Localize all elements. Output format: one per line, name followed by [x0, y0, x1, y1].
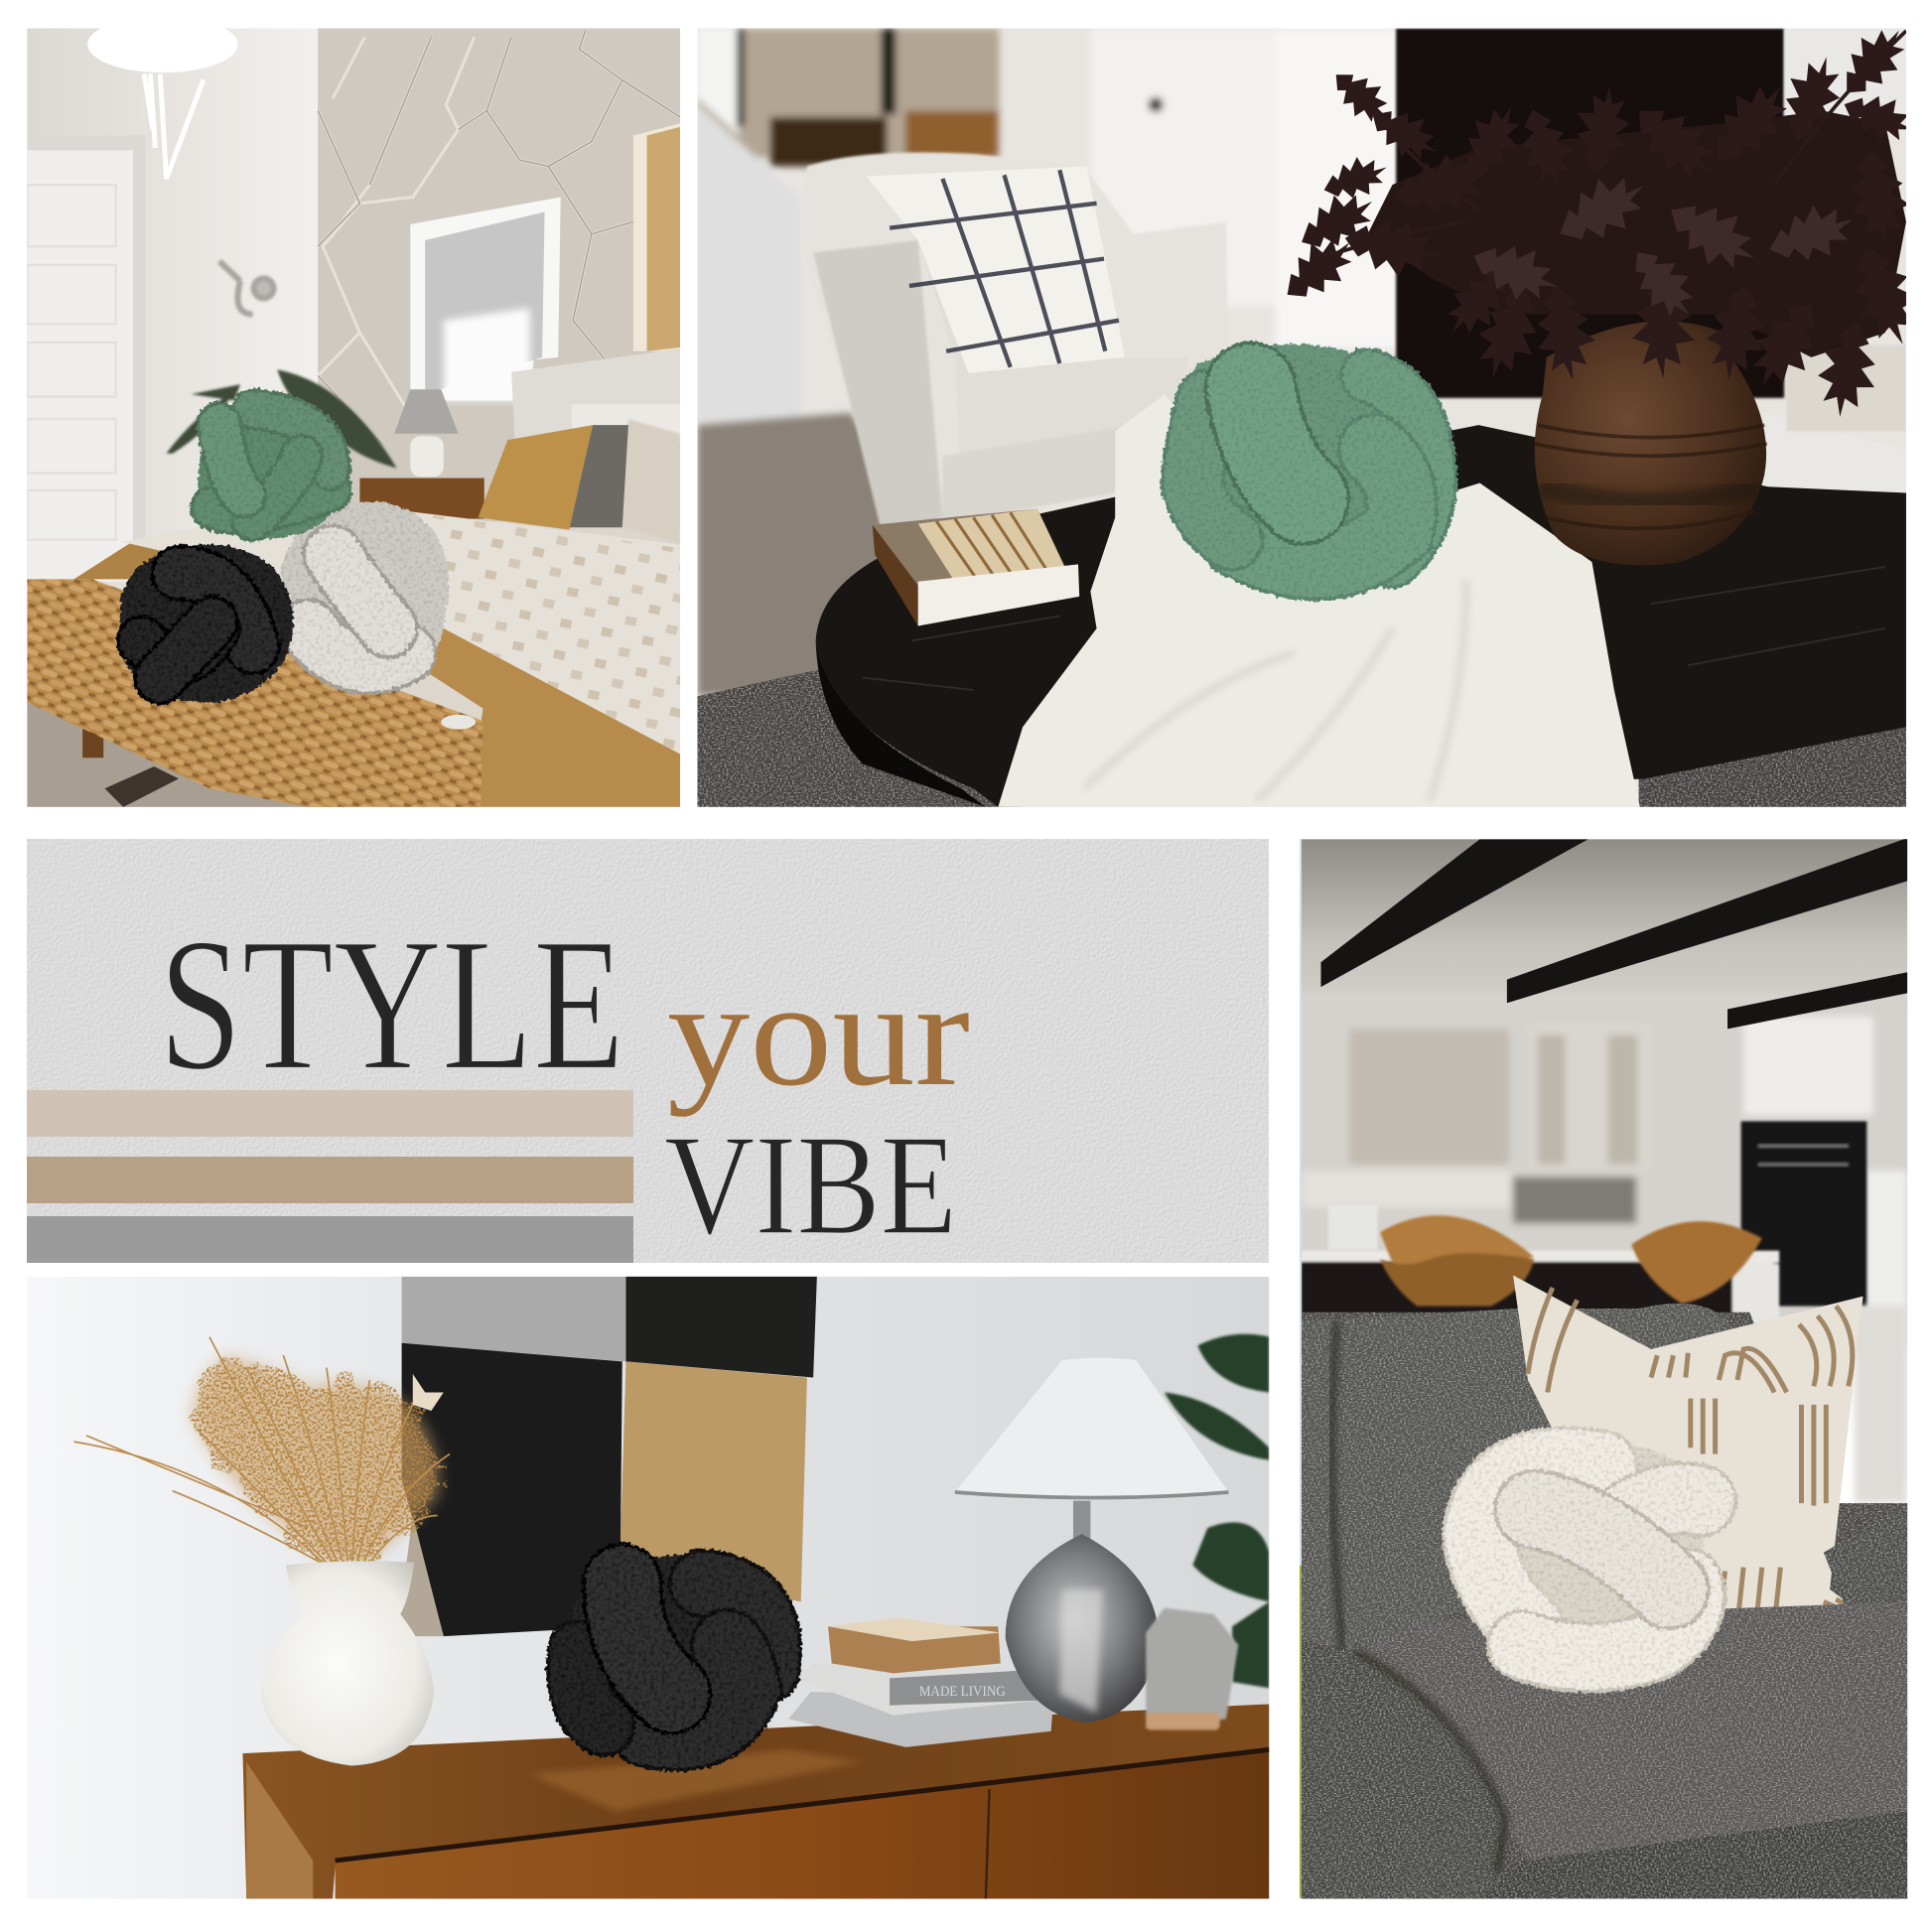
- green knot pillow: [211, 409, 331, 520]
- bed pillows: [479, 419, 680, 545]
- black knot pillow: [578, 1576, 767, 1738]
- wood floor: [697, 413, 936, 696]
- photo: green knot pillow on coffee table: [697, 15, 1932, 807]
- wicker bench: [27, 579, 483, 807]
- counter: [1302, 1205, 1779, 1324]
- kitchen wall and cabinets: [1282, 992, 1922, 1478]
- sofa right arm: [1824, 1503, 1907, 1614]
- oven: [1741, 1121, 1866, 1307]
- plaid pillow: [866, 167, 1125, 373]
- wall: [27, 1277, 1269, 1899]
- dark foliage: [1272, 15, 1932, 422]
- headboard: [511, 348, 680, 444]
- coffee table: [816, 425, 1906, 807]
- photo: bedroom with three knot pillows on wicker bench: [27, 16, 680, 807]
- houseplant: [167, 369, 397, 469]
- woven wall art: [397, 1277, 817, 1636]
- door: [27, 136, 145, 582]
- ceiling: [1302, 839, 1907, 1012]
- floor and rug: [27, 690, 333, 807]
- panel: title on textured plaster: [27, 839, 1269, 1265]
- wooden bowls: [1380, 1215, 1762, 1307]
- armchair: [801, 153, 1228, 530]
- photo: sideboard with black knot pillow: [27, 1277, 1269, 1899]
- sofa cushion shading: [1355, 1651, 1506, 1872]
- white door: [1090, 29, 1399, 348]
- ceiling beams: [1320, 838, 1907, 1029]
- cushion seam: [1332, 1320, 1343, 1651]
- white ceramic vase: [261, 1561, 434, 1765]
- green knot pillow: [1192, 366, 1430, 567]
- edge line on sofa photo: [1300, 839, 1302, 1898]
- nightstand: [359, 479, 484, 519]
- white knot pillow: [308, 529, 421, 664]
- wood vase: [1534, 321, 1767, 565]
- mustard duvet: [73, 532, 680, 807]
- sideboard: [242, 1704, 1269, 1899]
- striped cream pillow: [1513, 1276, 1885, 1629]
- book title: MADE LIVING: [919, 1684, 1006, 1700]
- dried flowers: [73, 1337, 450, 1563]
- tan leaning panel: [633, 123, 680, 351]
- heading: VIBE: VIBE: [664, 1106, 957, 1265]
- dark fireplace area: [1396, 29, 1784, 398]
- staircase blur: [697, 29, 1000, 425]
- wall sconce: [219, 261, 274, 314]
- rug: [697, 665, 1023, 807]
- light gap right of pillow: [1855, 1307, 1907, 1503]
- quilted bedspread: [123, 505, 680, 755]
- white books at right: [1759, 413, 1906, 517]
- pendant lamp: [87, 16, 238, 179]
- stripe: tan: [27, 1157, 633, 1203]
- geometric patterned wall: [318, 29, 680, 521]
- sofa back cushions: [1302, 1304, 1749, 1651]
- bench leg: [82, 729, 103, 759]
- black knot pillow: [142, 569, 269, 678]
- photo: white knot pillow on grey sofa: [1282, 838, 1922, 1899]
- houseplant: [1165, 1334, 1269, 1688]
- stripe: grey: [27, 1216, 633, 1263]
- stripe: beige: [27, 1090, 633, 1137]
- white throw blanket: [998, 394, 1640, 807]
- mirror: [410, 198, 561, 400]
- heading: your: your: [667, 950, 970, 1117]
- background wall: [697, 29, 1906, 807]
- light chair back behind foliage: [1787, 345, 1906, 431]
- left wall: [62, 28, 318, 590]
- white knot pillow: [1478, 1460, 1701, 1657]
- base backdrop: [27, 29, 680, 807]
- stacked books and box: [788, 1618, 1053, 1747]
- table lamp: [394, 389, 459, 477]
- heading: STYLE: STYLE: [159, 898, 624, 1110]
- table lamp: [955, 1358, 1228, 1723]
- sofa seat cushions: [1302, 1601, 1907, 1899]
- plaster background: [27, 839, 1269, 1263]
- hardcover book: [873, 509, 1079, 625]
- sofa base: [1302, 1312, 1907, 1899]
- glass jar: [1146, 1608, 1238, 1730]
